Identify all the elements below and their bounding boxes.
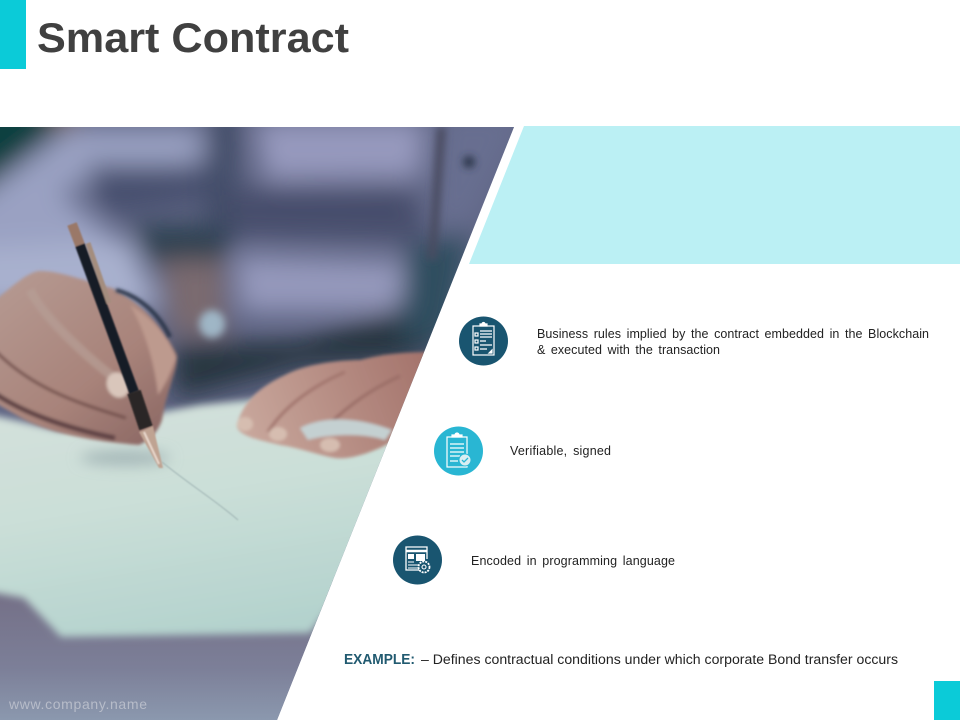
accent block: bottom right: [934, 681, 960, 720]
text: verifiable: Verifiable, signed: [510, 444, 611, 458]
text: business rules: Business rules implied by the contract embedded in the Blockchain: [537, 327, 929, 341]
left hand: [0, 271, 177, 445]
table foreground: [0, 580, 340, 720]
example line: EXAMPLE:: [344, 651, 415, 668]
text: business rules: [537, 327, 929, 357]
shirt details: [199, 127, 475, 338]
text: business rules: & executed with the transaction: [537, 343, 720, 357]
cuff: [116, 290, 170, 337]
light cyan parallelogram: [469, 126, 960, 264]
pen: [72, 224, 163, 468]
text: encoded: Encoded in programming language: [471, 554, 675, 568]
footer url: www.company.name: [8, 696, 147, 712]
icon: window with gear: [393, 536, 442, 584]
right hand: [237, 352, 440, 458]
icon: checklist clipboard: [459, 316, 508, 366]
paper: [0, 395, 440, 637]
title: Smart Contract: [37, 14, 349, 61]
photo: hand signing a document: [0, 100, 530, 720]
accent block: top left: [0, 0, 26, 69]
icon: verified clipboard: [434, 426, 483, 476]
paper shadows and pen stroke: [80, 451, 170, 465]
example line: – Defines contractual conditions under which corporate Bond transfer occurs: [421, 652, 898, 667]
